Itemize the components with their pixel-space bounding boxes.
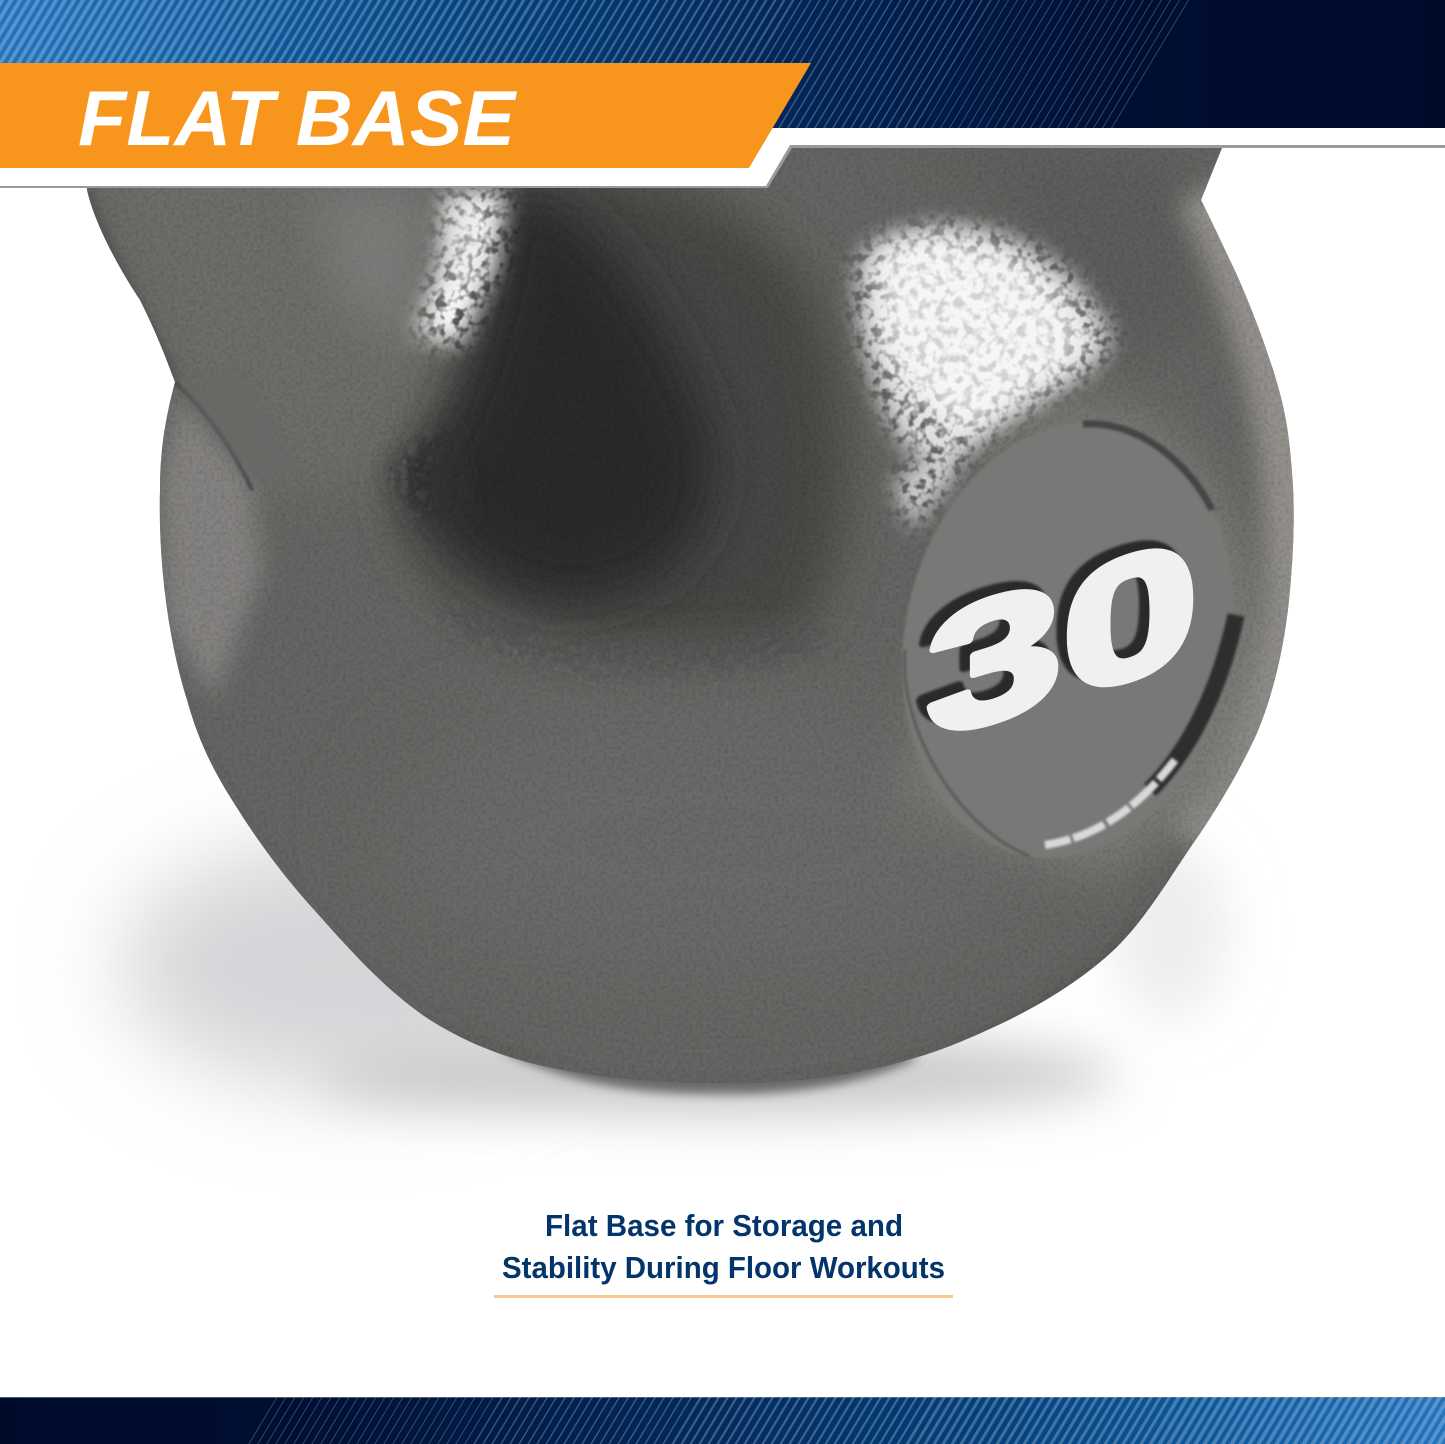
badge thick lower rim <box>1150 615 1236 790</box>
badge face <box>902 424 1233 858</box>
badge left edge <box>904 650 1030 856</box>
footer band <box>0 1397 1445 1444</box>
caption line 2: Stability During Floor Workouts <box>502 1250 945 1285</box>
floor shadow <box>120 840 1230 1115</box>
kettlebell photo <box>80 140 1310 1140</box>
caption line 1: Flat Base for Storage and <box>545 1208 903 1243</box>
striped blue gradient bar <box>0 0 1445 128</box>
badge rim highlight <box>1045 760 1175 845</box>
lower body shading <box>469 906 1151 1048</box>
footer stripes <box>248 1397 1445 1444</box>
caption <box>494 1208 953 1298</box>
specular highlight: left neck <box>310 190 505 350</box>
handle shading <box>87 188 437 451</box>
handle crease <box>87 190 254 491</box>
weight badge <box>902 419 1246 858</box>
number 30 face: 30 <box>926 501 1198 777</box>
embossed number 30 <box>914 538 1194 731</box>
specular highlight: shoulder <box>857 226 1110 530</box>
orange title banner <box>0 63 811 168</box>
dark reflection zone <box>390 140 1205 681</box>
number 30 relief shadow: 30 <box>917 494 1189 770</box>
caption underline <box>494 1295 953 1298</box>
white ribbon with grey edge <box>0 145 1445 188</box>
texture grain <box>80 140 1310 1100</box>
title: FLAT BASE <box>78 74 517 162</box>
header band <box>0 0 1445 188</box>
right lit edge <box>900 190 1292 880</box>
kettlebell base metal <box>80 140 1310 1100</box>
diagonal stripes <box>0 0 1195 128</box>
badge dark rim <box>1083 424 1212 510</box>
left lit edge of ball <box>160 395 262 700</box>
